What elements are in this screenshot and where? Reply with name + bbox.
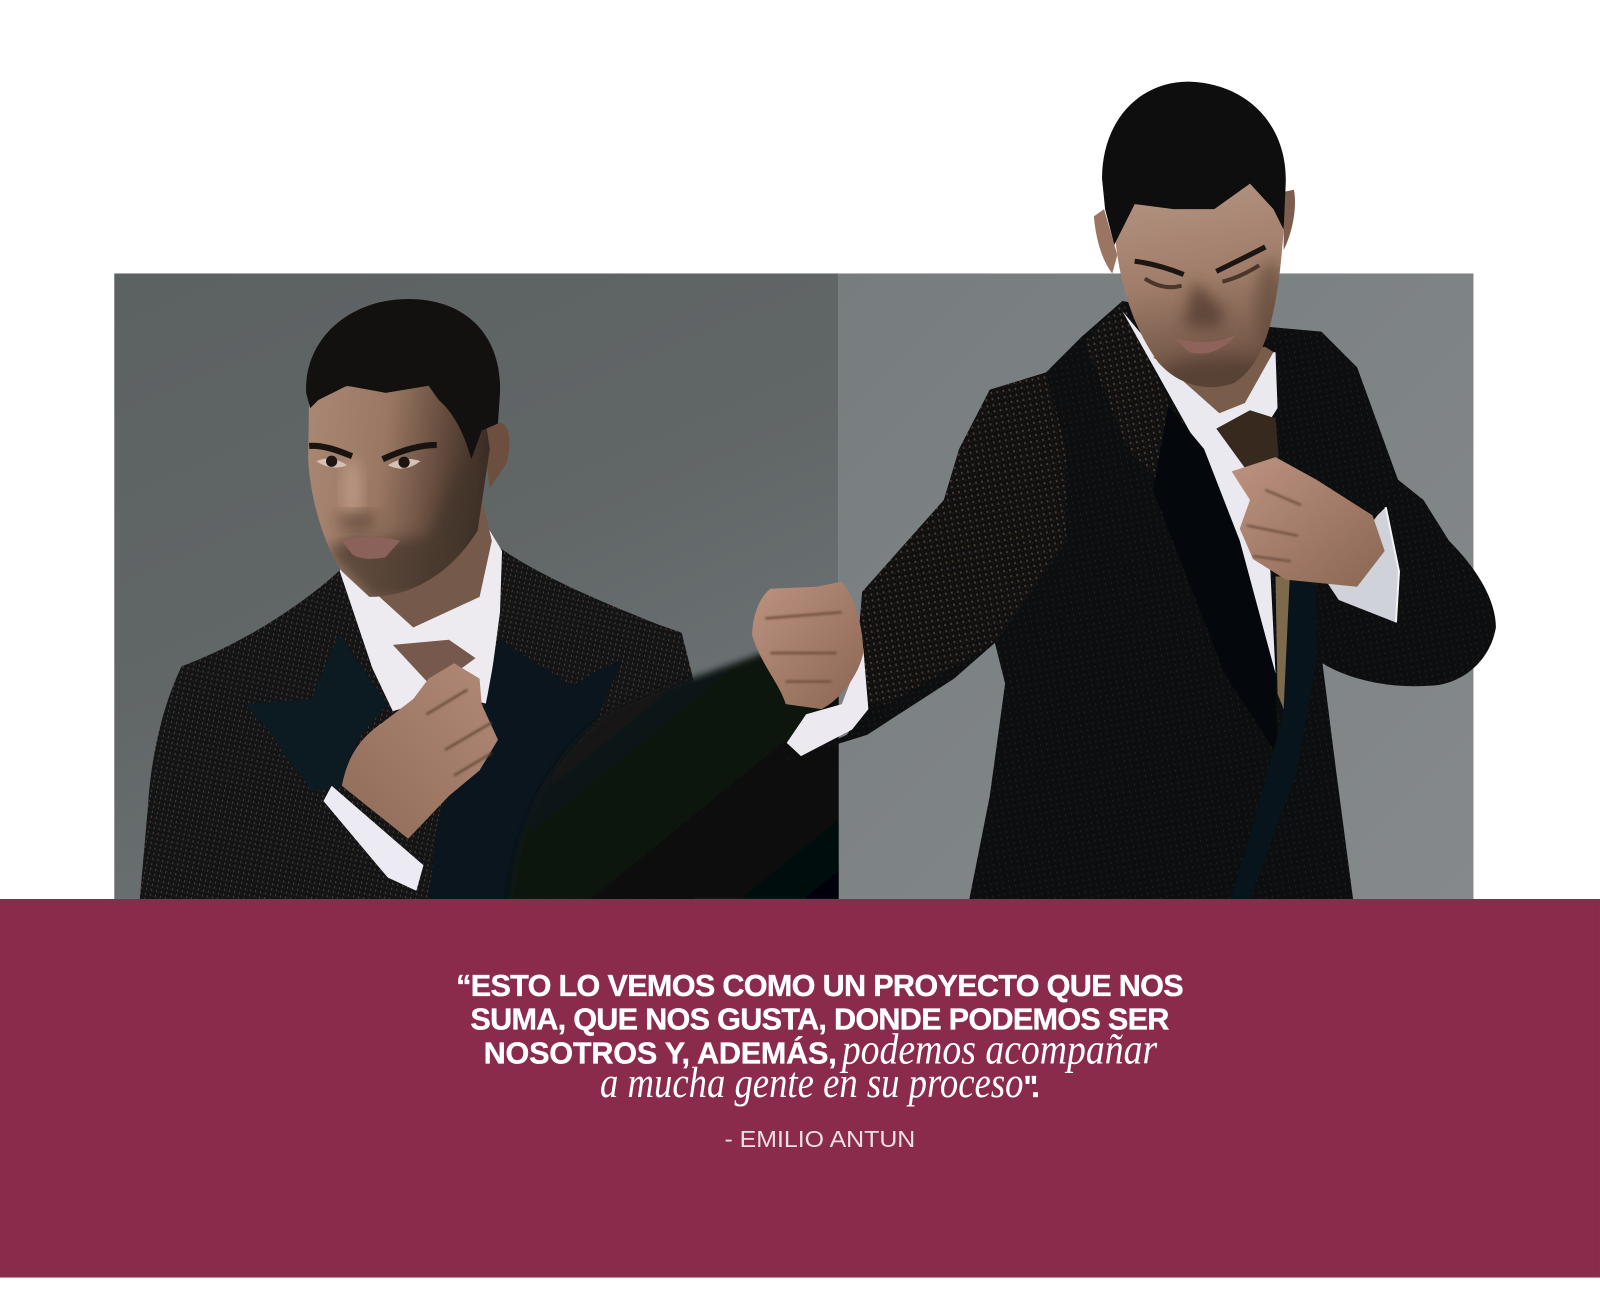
ear <box>486 422 510 488</box>
eyes and brows <box>1135 247 1265 274</box>
mouth <box>1176 335 1237 354</box>
quote text: podemos acompañar <box>839 1026 1157 1073</box>
hand <box>342 663 498 839</box>
quote attribution: - EMILIO ANTUN <box>724 1126 915 1152</box>
panel: left photo background <box>114 273 839 899</box>
tie <box>392 640 476 682</box>
gold tie strip <box>1276 577 1290 709</box>
glittering sleeve <box>857 372 1066 704</box>
jacket <box>140 548 704 899</box>
right hand <box>1232 457 1385 587</box>
shirt <box>1122 311 1278 673</box>
left shirt cuff <box>787 648 868 756</box>
quote text: “ESTO LO VEMOS COMO UN PROYECTO QUE NOS <box>456 969 1184 1003</box>
hair <box>306 299 500 459</box>
tie knot <box>1216 410 1279 500</box>
navy lapels <box>245 635 388 791</box>
black lapel <box>1153 406 1278 755</box>
jacket body and arms <box>781 301 1496 899</box>
eyes and brows <box>309 445 437 459</box>
quote text: ". <box>1023 1070 1040 1104</box>
photo: left portrait of man adjusting tie <box>140 299 847 903</box>
neck and shirt <box>340 531 502 711</box>
glittering lapel <box>1085 301 1168 480</box>
blurred foreground shoulder <box>507 650 839 899</box>
quote text: SUMA, QUE NOS GUSTA, DONDE PODEMOS SER <box>470 1003 1169 1037</box>
mouth <box>342 537 400 559</box>
head <box>308 383 490 597</box>
quote band <box>0 899 1600 1278</box>
right shirt cuff <box>1327 507 1399 622</box>
navy lapel strip <box>1231 580 1316 899</box>
cuff <box>323 786 423 891</box>
photo: right cut-out of man with extended arm <box>752 82 1496 899</box>
panel: right photo background <box>839 273 1473 899</box>
fist <box>752 582 863 709</box>
quote text <box>456 969 1184 1107</box>
quote text: NOSOTROS Y, ADEMÁS, <box>484 1035 837 1070</box>
head <box>1115 173 1284 387</box>
hair <box>1102 82 1286 245</box>
facial shading <box>1163 258 1280 387</box>
quote text: a mucha gente en su proceso <box>600 1060 1023 1107</box>
neck <box>1153 347 1273 413</box>
facial shading <box>328 459 462 597</box>
ears <box>1094 209 1117 273</box>
